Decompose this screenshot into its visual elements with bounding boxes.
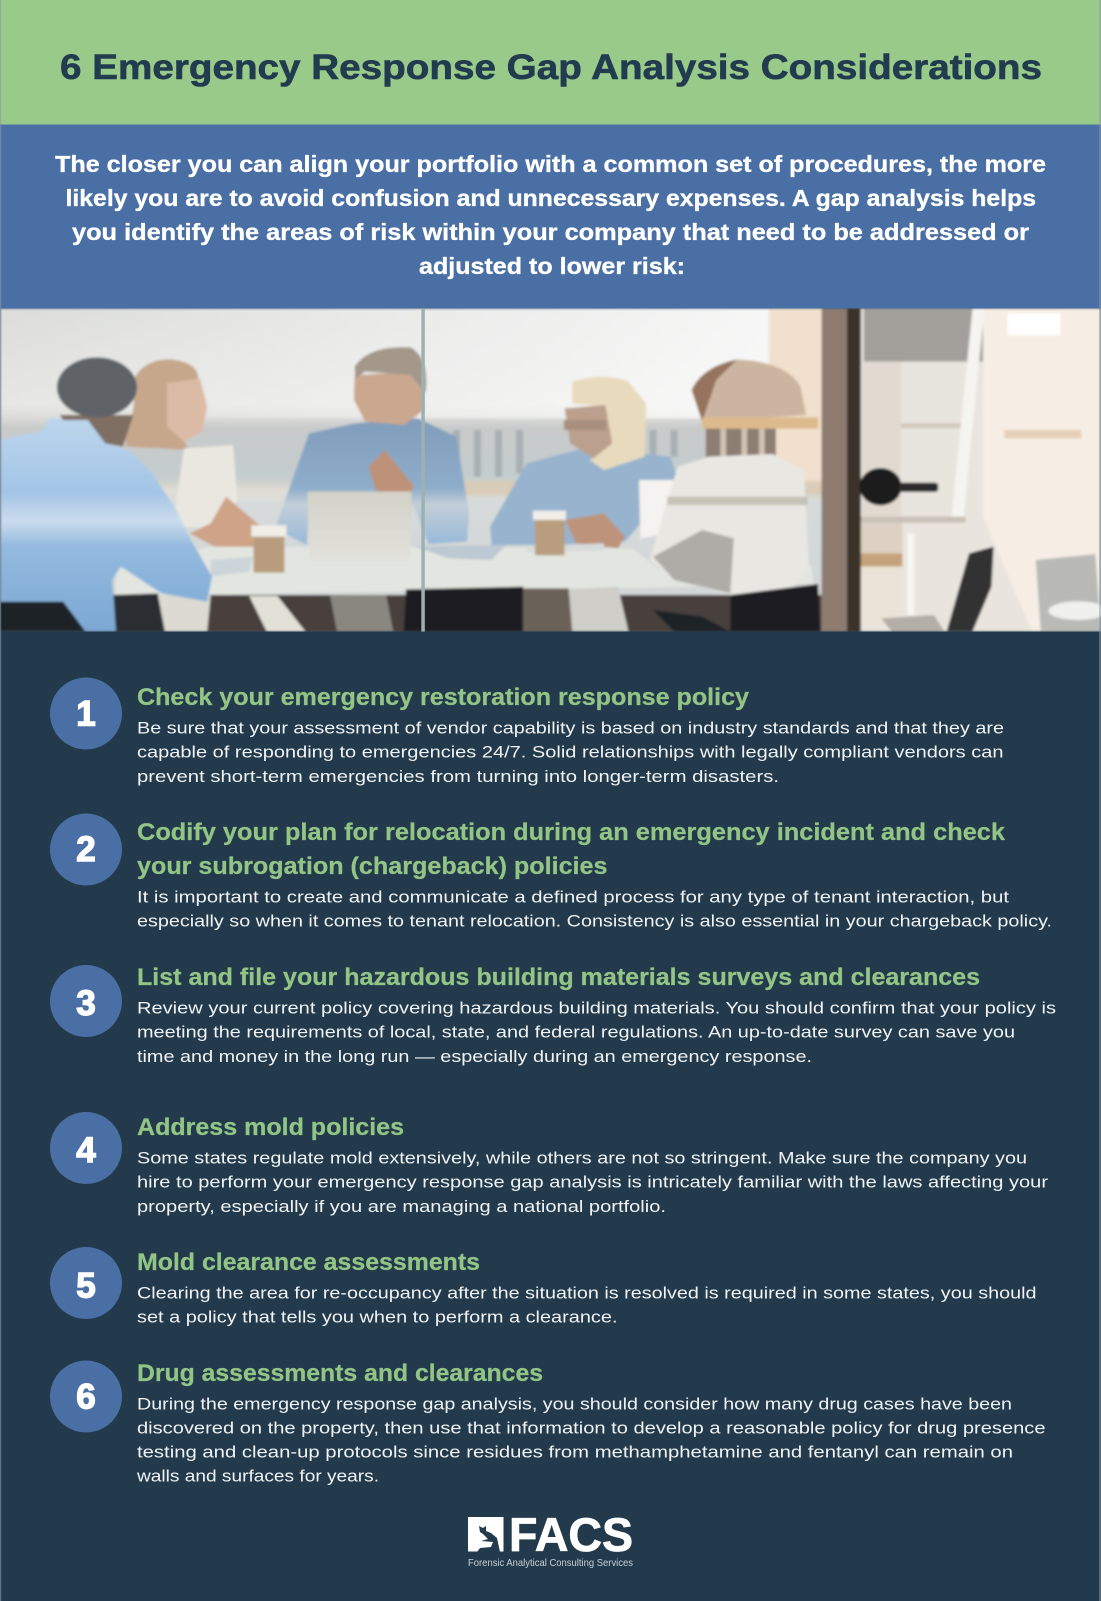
item 5	[50, 1247, 1036, 1326]
body 2: especially so when it comes to tenant relocation. Consistency is also essential in your chargeback policy.	[137, 912, 1052, 930]
right interior beyond the door	[860, 308, 1101, 632]
number badge 3: 3	[76, 984, 96, 1023]
body 3: meeting the requirements of local, state, and federal regulations. An up-to-date survey can save you	[137, 1022, 1015, 1042]
number badge 1	[50, 678, 122, 750]
heading 2	[137, 819, 1006, 880]
number badge 6	[50, 1360, 122, 1432]
heading 3: List and file your hazardous building materials surveys and clearances	[137, 964, 980, 991]
panel: title banner	[0, 0, 1101, 124]
body 6	[136, 1394, 1046, 1486]
body 2	[137, 888, 1052, 930]
body 4: property, especially if you are managing a national portfolio.	[137, 1197, 666, 1216]
number badge 2: 2	[76, 830, 96, 869]
icon: microscope square	[468, 1517, 504, 1552]
panel: intro statement	[0, 124, 1101, 308]
item 4	[50, 1112, 1048, 1216]
logo: FACS	[468, 1509, 633, 1569]
heading 2: Codify your plan for relocation during an emergency incident and check	[137, 819, 1006, 846]
body 4: Some states regulate mold extensively, while others are not so stringent. Make sure the company you	[137, 1148, 1027, 1168]
item 1	[50, 678, 1004, 786]
body 3	[137, 998, 1056, 1066]
body 5: Clearing the area for re-occupancy after the situation is resolved is required in some states, you should	[137, 1284, 1036, 1302]
number badge 5: 5	[76, 1266, 96, 1306]
second laptop screen	[639, 480, 674, 538]
body 5: set a policy that tells you when to perform a clearance.	[137, 1308, 618, 1326]
body 4: hire to perform your emergency response gap analysis is intricately familiar with the laws affecting your	[137, 1172, 1048, 1192]
body 5	[137, 1284, 1036, 1326]
intro text	[55, 151, 1046, 279]
door frame	[822, 308, 861, 632]
body 6: testing and clean-up protocols since residues from methamphetamine and fentanyl can remain on	[137, 1442, 1013, 1462]
number badge 1: 1	[76, 694, 96, 734]
title: 6 Emergency Response Gap Analysis Considerations	[60, 48, 1042, 87]
heading 2: your subrogation (chargeback) policies	[137, 853, 608, 880]
body 6: During the emergency response gap analysis, you should consider how many drug cases have been	[137, 1394, 1012, 1414]
person: blonde older woman	[490, 377, 678, 548]
body 6: walls and surfaces for years.	[136, 1466, 379, 1486]
number badge 4: 4	[76, 1131, 96, 1170]
body 3: Review your current policy covering hazardous building materials. You should confirm that your policy is	[137, 998, 1056, 1018]
body 1: Be sure that your assessment of vendor capability is based on industry standards and that they are	[137, 718, 1004, 738]
intro text: likely you are to avoid confusion and unnecessary expenses. A gap analysis helps	[66, 185, 1036, 211]
intro text: you identify the areas of risk within your company that need to be addressed or	[72, 219, 1029, 245]
heading 4: Address mold policies	[137, 1114, 404, 1141]
photo: team meeting seen through glass	[0, 308, 1101, 632]
glass partition line	[421, 308, 425, 632]
coffee cup right	[533, 511, 566, 555]
item 6	[50, 1360, 1046, 1486]
item 2	[50, 814, 1052, 930]
wordmark: FACS	[509, 1509, 633, 1562]
person: woman from behind, right	[650, 359, 818, 595]
door handle	[859, 468, 938, 505]
number badge 4	[50, 1112, 122, 1184]
body 2: It is important to create and communicate a defined process for any type of tenant interaction, but	[137, 888, 1009, 906]
body 1	[137, 718, 1004, 786]
heading 5: Mold clearance assessments	[137, 1249, 480, 1276]
number badge 6: 6	[76, 1378, 96, 1416]
body 1: capable of responding to emergencies 24/7. Solid relationships with legally compliant vendors can	[137, 742, 1004, 762]
number badge 2	[50, 814, 122, 886]
body 4	[137, 1148, 1048, 1216]
laptop	[306, 490, 413, 546]
body 1: prevent short-term emergencies from turning into longer-term disasters.	[137, 767, 779, 786]
intro text: The closer you can align your portfolio with a common set of procedures, the more	[55, 151, 1046, 177]
body 6: discovered on the property, then use that information to develop a reasonable policy for drug presence	[137, 1418, 1046, 1438]
person: man in blue shirt	[277, 347, 469, 545]
body 3: time and money in the long run — especially during an emergency response.	[137, 1047, 812, 1066]
person: man from behind, left	[0, 357, 212, 632]
number badge 5	[50, 1247, 122, 1319]
coffee cup left	[251, 525, 286, 573]
item 3	[50, 964, 1056, 1066]
tagline: Forensic Analytical Consulting Services	[468, 1557, 633, 1569]
heading 6: Drug assessments and clearances	[137, 1360, 543, 1387]
table	[116, 547, 813, 596]
heading 1: Check your emergency restoration response policy	[137, 684, 750, 711]
under-table shadows and legs	[109, 584, 822, 632]
intro text: adjusted to lower risk:	[419, 253, 685, 279]
number badge 3	[50, 965, 122, 1037]
person: blonde woman	[125, 359, 261, 552]
